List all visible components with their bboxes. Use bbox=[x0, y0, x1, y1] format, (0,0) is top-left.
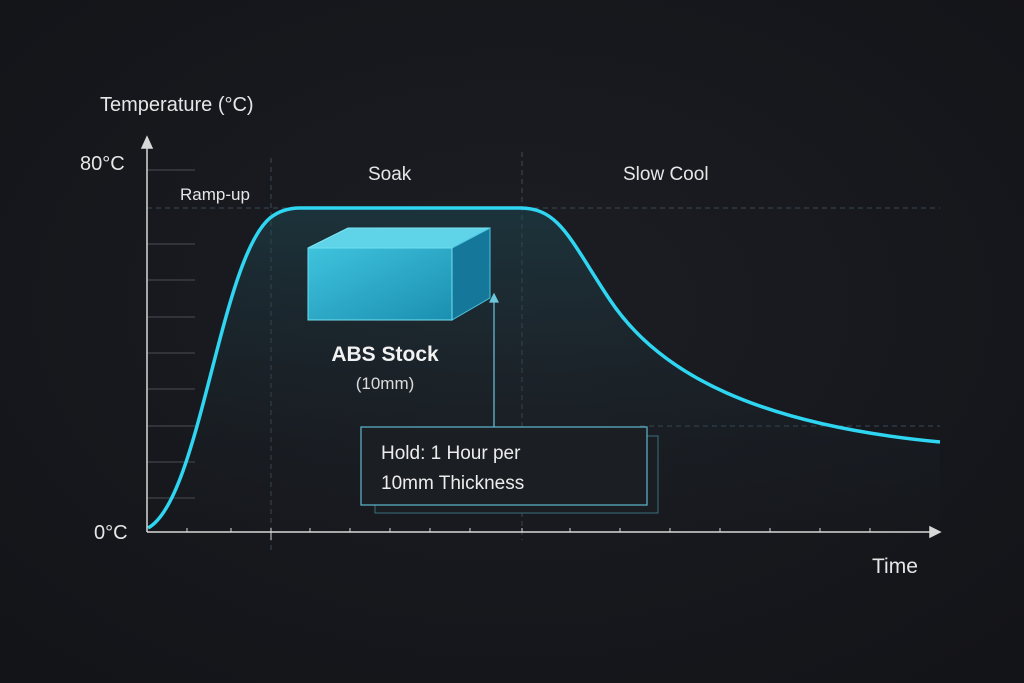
callout: 10mm Thickness bbox=[381, 473, 524, 494]
grid lines bbox=[147, 170, 195, 498]
text: 80°C bbox=[80, 153, 125, 175]
callout: Hold: 1 Hour per bbox=[381, 443, 521, 464]
callout bbox=[361, 427, 658, 513]
axes bbox=[142, 137, 940, 540]
text: 0°C bbox=[94, 522, 128, 544]
axis labels: Temperature (°C) bbox=[100, 94, 254, 116]
text: Slow Cool bbox=[623, 164, 709, 185]
text: Time bbox=[872, 555, 918, 578]
phase labels: Ramp-up bbox=[180, 185, 250, 204]
temperature curve bbox=[148, 208, 940, 528]
label: ABS Stock: ABS Stock bbox=[331, 343, 439, 366]
icon: ABS block bbox=[308, 228, 490, 320]
area under curve bbox=[148, 208, 940, 532]
text: Soak bbox=[368, 164, 412, 185]
arrow bbox=[490, 294, 498, 427]
text: (10mm) bbox=[356, 374, 414, 393]
